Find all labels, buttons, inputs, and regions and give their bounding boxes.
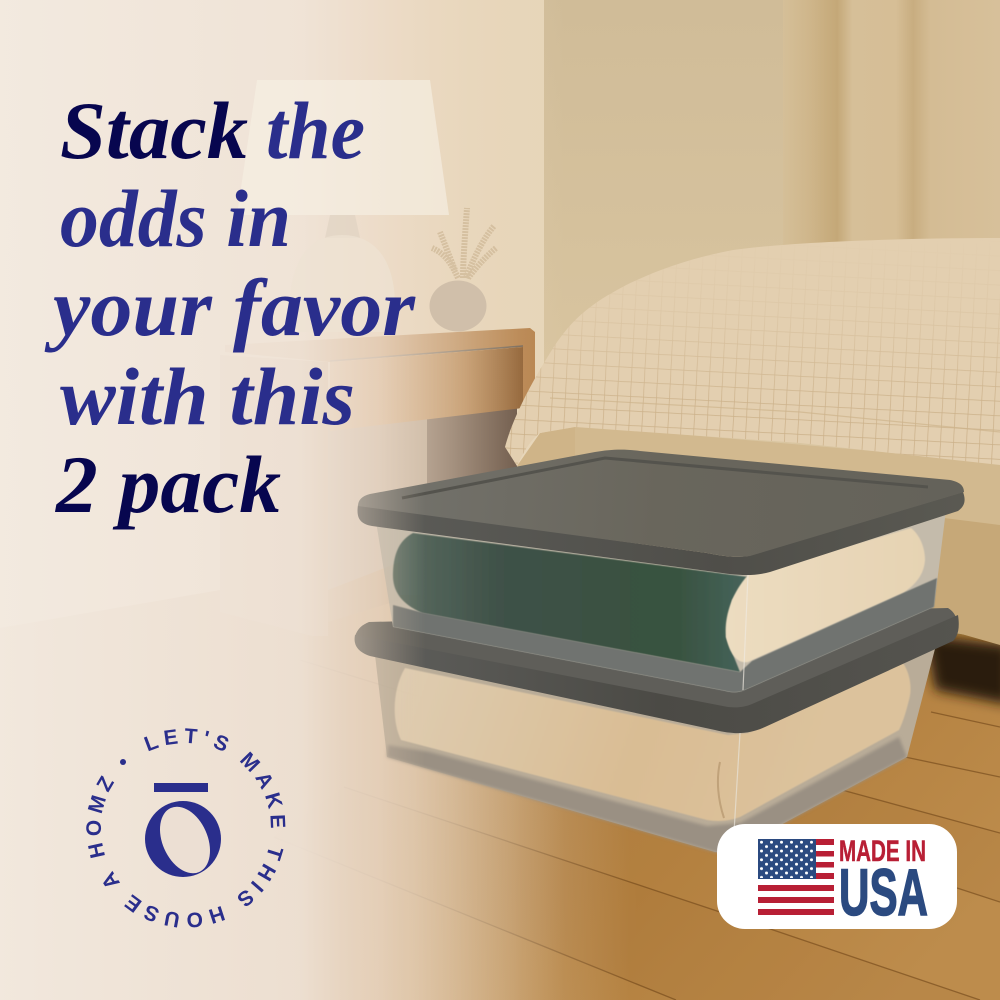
- top box body: [375, 510, 946, 692]
- lamp shade: [237, 80, 449, 215]
- tabletop: [225, 328, 535, 408]
- flag stars: [759, 840, 815, 878]
- top lid: [358, 450, 965, 575]
- blanket: [505, 238, 1000, 466]
- bottom box floor band: [387, 737, 907, 852]
- nightstand: [220, 328, 535, 636]
- bottom lid: [355, 608, 959, 733]
- flag stripes: [758, 839, 834, 915]
- drawer front: [330, 347, 523, 431]
- floor plank lines: [274, 660, 1000, 1000]
- left fade overlay: [0, 0, 565, 1000]
- green blanket: [393, 533, 748, 672]
- floor planks tone: [274, 787, 1000, 1000]
- dried plant vase: [430, 208, 496, 332]
- top lid side: [358, 492, 965, 575]
- blanket underside fold: [517, 427, 575, 472]
- wooden floor: [0, 570, 1000, 1000]
- box corner highlight: [743, 575, 748, 690]
- table lamp: [237, 80, 449, 332]
- headline: [44, 85, 416, 530]
- logo macron bar: [154, 783, 208, 792]
- pampas plumes: [432, 208, 496, 278]
- lower shelf: [328, 562, 400, 622]
- lamp base: [290, 235, 395, 332]
- front leg: [220, 355, 328, 636]
- curtain: [783, 0, 1000, 270]
- top lid inset edge: [402, 458, 928, 498]
- top box floor band: [393, 578, 937, 692]
- drawer top shadow line: [330, 346, 523, 361]
- blanket hem: [550, 398, 1000, 432]
- USA text: USA: [839, 855, 928, 929]
- vase: [430, 280, 486, 332]
- wall: [0, 0, 1000, 660]
- stacked storage boxes: [355, 450, 965, 852]
- bottom blanket fold: [718, 762, 724, 818]
- bottom lid side: [355, 615, 959, 733]
- bottom box body: [375, 645, 936, 852]
- bottom lid top: [355, 608, 957, 716]
- logo letter o: [145, 799, 221, 881]
- bottom blanket: [395, 663, 911, 821]
- headline line 4: with this: [60, 351, 355, 442]
- headline line 1: Stack: [60, 85, 248, 176]
- circular slogan: LET'S MAKE THIS HOUSE A HOMZ: [86, 728, 286, 928]
- headline line 5: 2 pack: [55, 439, 281, 530]
- badge background: [717, 824, 957, 929]
- cream blanket roll: [726, 528, 925, 662]
- top lid face: [358, 450, 964, 557]
- under-bed shadow: [925, 635, 1000, 705]
- headline line 3: your favor: [44, 262, 416, 353]
- box corner highlight: [734, 733, 740, 826]
- back panel: [328, 405, 428, 595]
- made in USA badge: [717, 824, 957, 929]
- headline line 2: odds in: [60, 173, 291, 264]
- headline line 1: [60, 85, 365, 176]
- brand seal: [86, 728, 286, 928]
- floor light wash: [340, 600, 630, 1000]
- lamp neck: [325, 215, 360, 238]
- flag canton: [758, 839, 816, 879]
- top box: [375, 510, 946, 692]
- bed: [500, 238, 1000, 645]
- slogan dot: [120, 759, 126, 765]
- blanket quilting: [506, 292, 1000, 464]
- bottom box: [375, 645, 936, 852]
- made in text: MADE IN: [839, 835, 926, 868]
- bed frame: [800, 500, 1000, 645]
- dark recess under drawer: [427, 405, 517, 595]
- US flag: [758, 839, 834, 915]
- wall corner: [0, 0, 544, 660]
- headline line 1: the: [266, 85, 365, 176]
- bed skirt: [573, 425, 1000, 525]
